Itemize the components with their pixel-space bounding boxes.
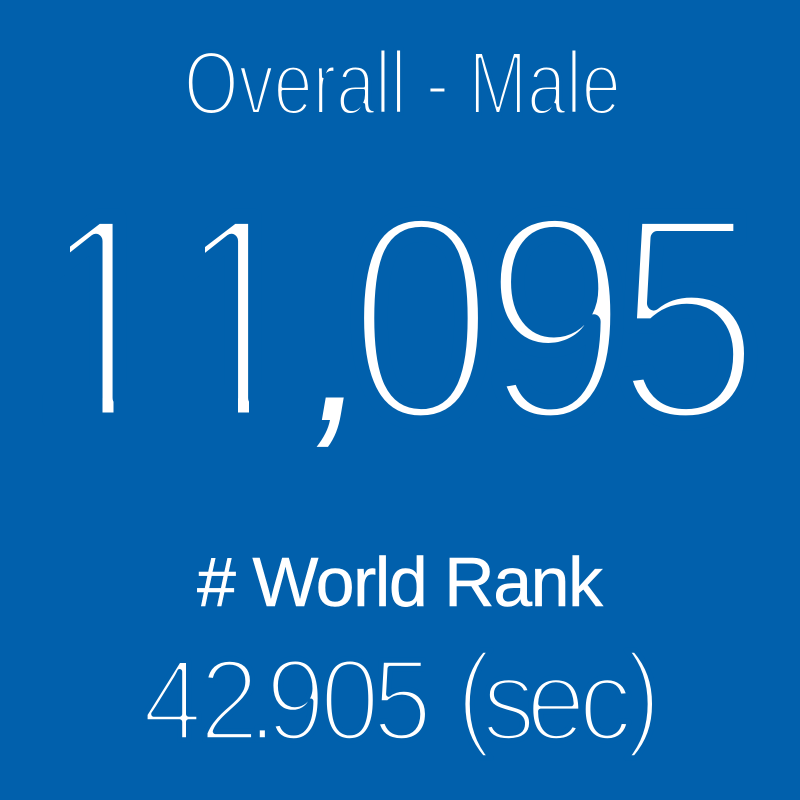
value: time in seconds: ( (456, 629, 492, 759)
big number: 11 (29, 152, 313, 483)
title: Overall - Male (184, 34, 621, 134)
value: time in seconds: sec (482, 635, 632, 765)
big number: , (313, 231, 366, 465)
big number (29, 152, 762, 483)
value: time in seconds: 42.905 (143, 635, 432, 765)
big number: 095 (347, 152, 762, 483)
value: time in seconds: ) (626, 629, 661, 759)
label: world rank: # World Rank (197, 543, 604, 621)
